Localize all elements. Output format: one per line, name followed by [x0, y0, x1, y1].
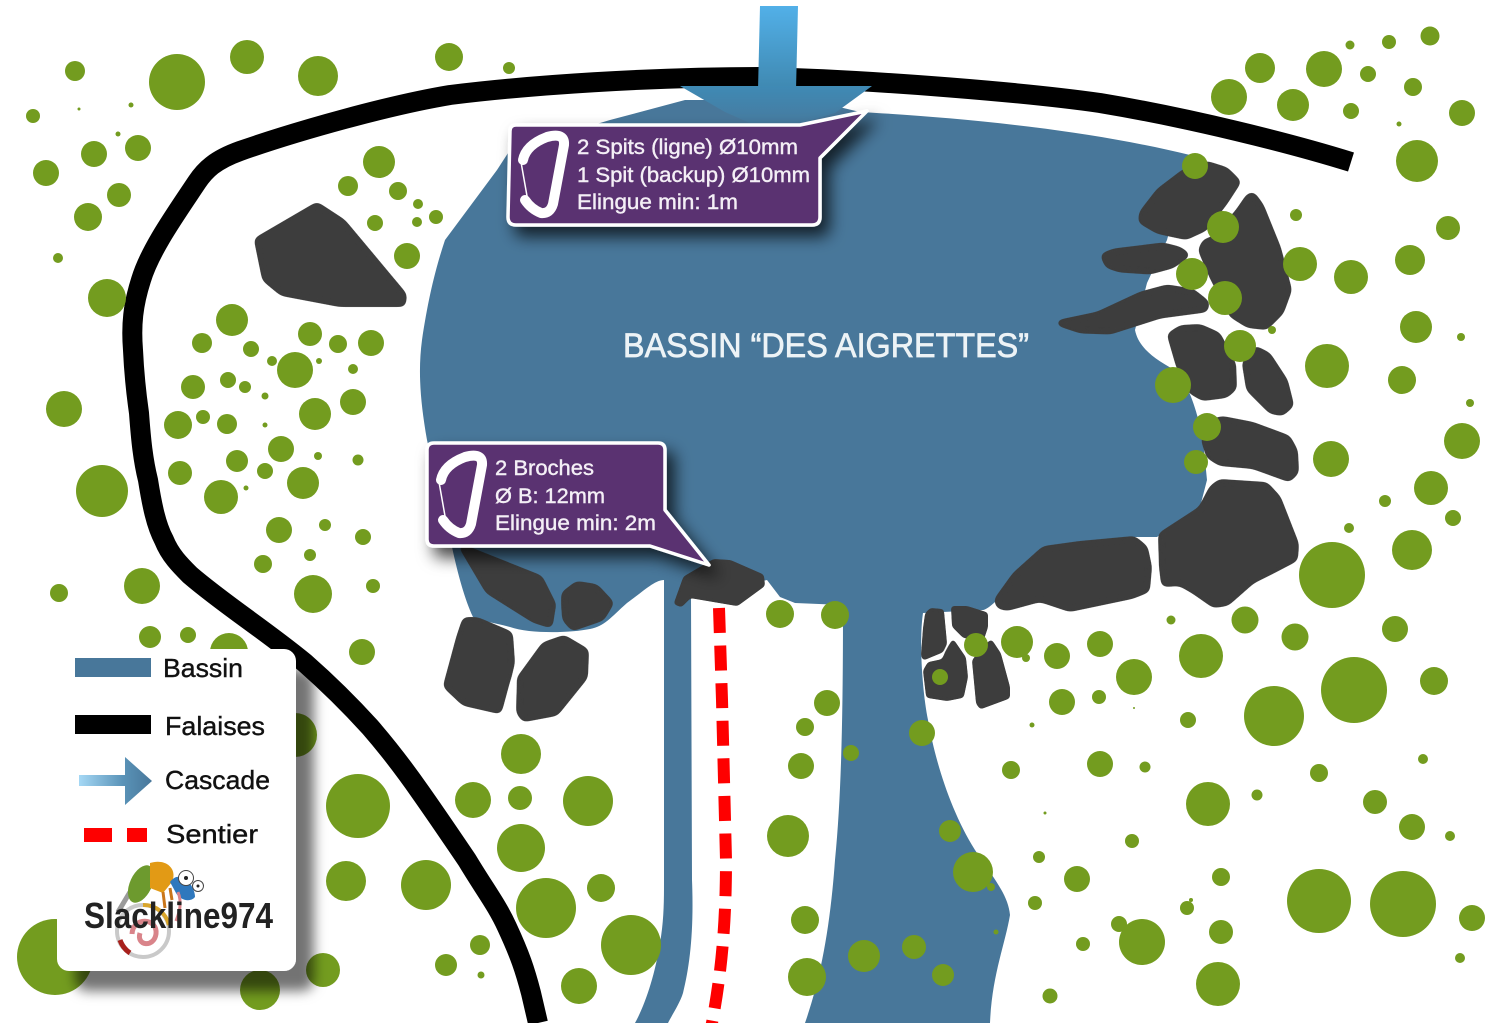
callout text: 2 Broches: [495, 457, 594, 480]
callout: top anchors: [508, 111, 867, 225]
callout text: [577, 136, 810, 214]
logo: chameleon Slackline974: [84, 861, 273, 957]
logo: chameleon Slackline974: Slackline974: [84, 895, 273, 936]
legend: cascade: Cascade: [165, 765, 270, 795]
icon: carabiner: [439, 456, 482, 533]
legend: bassin: [75, 653, 243, 683]
bassin water: [420, 100, 1207, 1023]
callout text: [495, 457, 656, 535]
panel: legend: [57, 649, 296, 971]
callout text: Elingue min: 1m: [577, 191, 738, 214]
callout text: 2 Spits (ligne) Ø10mm: [577, 136, 798, 159]
legend: falaises: Falaises: [165, 711, 265, 741]
callout: lower anchors: [427, 443, 709, 565]
legend: bassin: Bassin: [163, 653, 243, 683]
cliff line: [132, 77, 1351, 1023]
waterfall arrow: [680, 6, 872, 132]
rocks: [257, 164, 1296, 719]
legend: sentier: [84, 819, 258, 849]
callout text: Ø B: 12mm: [495, 485, 605, 508]
legend: falaises: [75, 711, 265, 741]
sentier red dashed path: [708, 608, 726, 1023]
callout text: 1 Spit (backup) Ø10mm: [577, 164, 810, 187]
title: bassin name: BASSIN “DES AIGRETTES”: [623, 327, 1029, 365]
callout text: Elingue min: 2m: [495, 512, 656, 535]
legend: sentier: Sentier: [166, 819, 258, 849]
icon: carabiner: [521, 136, 564, 213]
small rocks: [676, 561, 1008, 707]
legend: cascade: [79, 757, 270, 805]
